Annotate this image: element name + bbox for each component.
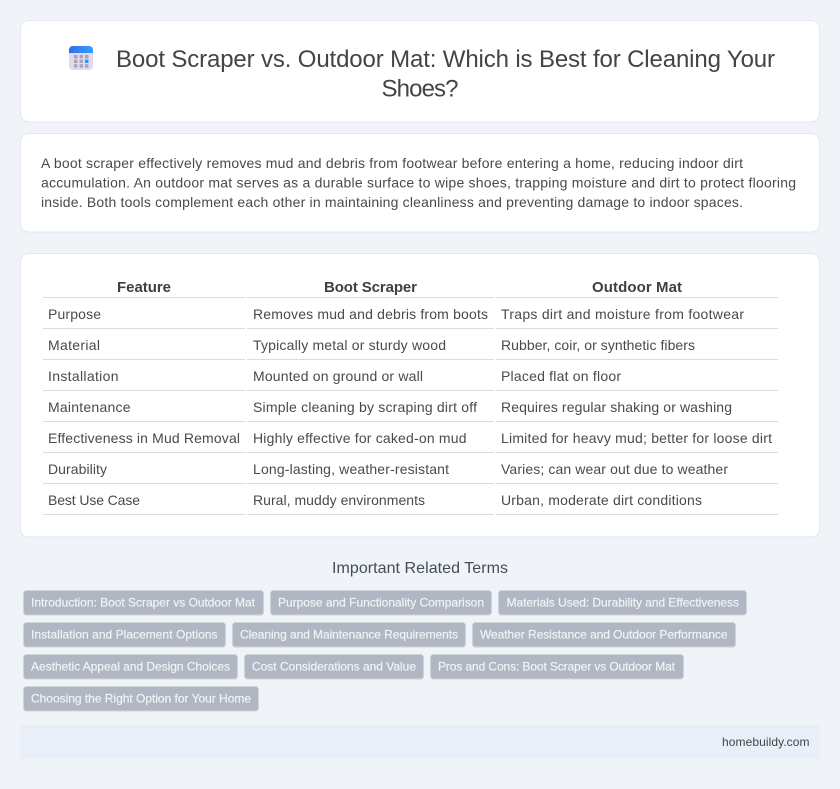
tag: Weather Resistance and Outdoor Performance bbox=[480, 628, 728, 642]
row: material: Material bbox=[48, 337, 100, 353]
title: Boot Scraper vs. Outdoor Mat: Which is Best for Cleaning Your bbox=[116, 46, 775, 73]
row: best use case: Rural, muddy environments bbox=[253, 492, 425, 508]
text block: introduction: accumulation. An outdoor mat serves as a durable surface to wipe shoes, trapping moisture and dirt to protect flooring bbox=[41, 174, 796, 190]
text block: introduction: A boot scraper effectively removes mud and debris from footwear before entering a home, reducing indoor dirt bbox=[41, 155, 743, 171]
tag bbox=[244, 654, 424, 679]
tag: Cleaning and Maintenance Requirements bbox=[240, 628, 458, 642]
row: installation bbox=[48, 368, 621, 384]
row: best use case: Best Use Case bbox=[48, 492, 140, 508]
panel: comparison table bbox=[20, 254, 820, 537]
icon: calendar bbox=[69, 46, 93, 70]
tag bbox=[24, 654, 238, 679]
row: purpose: Purpose bbox=[48, 306, 101, 322]
panel: intro paragraph bbox=[20, 134, 820, 232]
tag bbox=[24, 686, 258, 711]
tag bbox=[24, 622, 226, 647]
tag bbox=[430, 654, 684, 679]
tag bbox=[232, 622, 466, 647]
row: best use case: Urban, moderate dirt conditions bbox=[501, 492, 702, 508]
row: maintenance: Maintenance bbox=[48, 399, 131, 415]
tag: Pros and Cons: Boot Scraper vs Outdoor Mat bbox=[438, 660, 676, 674]
panel: title card bbox=[20, 20, 820, 122]
table header: Outdoor Mat bbox=[592, 279, 682, 296]
row: material: Rubber, coir, or synthetic fibers bbox=[501, 337, 695, 353]
row: effectiveness: Effectiveness in Mud Removal bbox=[48, 430, 240, 446]
tag bbox=[498, 590, 746, 615]
row: effectiveness bbox=[48, 430, 772, 446]
tag: Choosing the Right Option for Your Home bbox=[31, 692, 251, 706]
row: purpose bbox=[48, 306, 744, 322]
tag: Purpose and Functionality Comparison bbox=[278, 596, 484, 610]
table header: Boot Scraper bbox=[324, 279, 417, 296]
row: durability: Durability bbox=[48, 461, 107, 477]
row: effectiveness: Limited for heavy mud; better for loose dirt bbox=[501, 430, 772, 446]
table header: Feature bbox=[117, 279, 171, 296]
row: purpose: Removes mud and debris from boots bbox=[253, 306, 488, 322]
footer: homebuildy.com bbox=[722, 735, 810, 749]
text block: introduction bbox=[41, 155, 796, 210]
panel: related term tags bbox=[24, 590, 746, 711]
row: durability: Long-lasting, weather-resistant bbox=[253, 461, 449, 477]
row: installation: Mounted on ground or wall bbox=[253, 368, 423, 384]
row: durability bbox=[48, 461, 728, 477]
row: durability: Varies; can wear out due to weather bbox=[501, 461, 728, 477]
tag: Introduction: Boot Scraper vs Outdoor Mat bbox=[31, 596, 256, 610]
tag bbox=[24, 590, 264, 615]
row: maintenance: Requires regular shaking or washing bbox=[501, 399, 732, 415]
row: purpose: Traps dirt and moisture from footwear bbox=[501, 306, 744, 322]
footer bbox=[20, 725, 820, 759]
text block: introduction: inside. Both tools complement each other in maintaining cleanliness and preventing damage to indoor spaces. bbox=[41, 194, 743, 210]
tag bbox=[472, 622, 736, 647]
tag bbox=[270, 590, 492, 615]
row: installation: Installation bbox=[48, 368, 118, 384]
tag: Materials Used: Durability and Effectiveness bbox=[506, 596, 739, 610]
title: Shoes? bbox=[382, 76, 458, 102]
row: material bbox=[48, 337, 695, 353]
row: material: Typically metal or sturdy wood bbox=[253, 337, 446, 353]
row: maintenance: Simple cleaning by scraping dirt off bbox=[253, 399, 477, 415]
row: installation: Placed flat on floor bbox=[501, 368, 621, 384]
title bbox=[116, 46, 775, 102]
heading: related terms: Important Related Terms bbox=[332, 560, 508, 577]
row: maintenance bbox=[48, 399, 732, 415]
table header bbox=[117, 279, 682, 296]
row: effectiveness: Highly effective for caked-on mud bbox=[253, 430, 466, 446]
tag: Cost Considerations and Value bbox=[252, 660, 416, 674]
row: best use case bbox=[48, 492, 702, 508]
tag: Aesthetic Appeal and Design Choices bbox=[31, 660, 230, 674]
tag: Installation and Placement Options bbox=[31, 628, 218, 642]
